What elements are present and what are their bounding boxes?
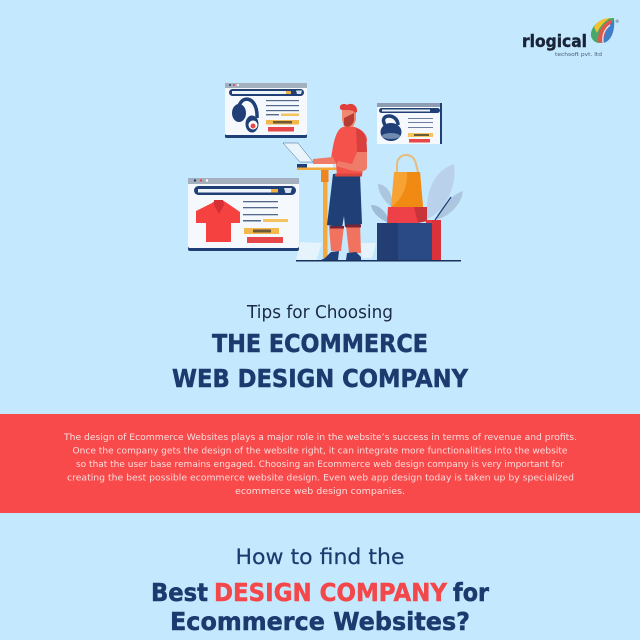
shorts	[327, 174, 362, 228]
ground line	[296, 260, 461, 262]
product card: headphones	[225, 83, 307, 138]
intro paragraph: Once the company gets the design of the website right, it can integrate more functionalities into the website	[72, 446, 568, 456]
heading: how to find the: How to find the	[236, 545, 404, 569]
intro paragraph: so that the user base remains engaged. Choosing an Ecommerce web design company is very important for	[76, 460, 564, 470]
logo: rlogical techsoft: rlogical	[522, 32, 587, 51]
white floor shapes	[296, 242, 322, 261]
standing desk with laptop	[283, 143, 345, 258]
product card: polo shirt	[188, 178, 299, 251]
heading: tips for choosing: Tips for Choosing	[246, 303, 393, 323]
legs	[329, 226, 344, 251]
panel: red intro band	[0, 414, 640, 513]
intro paragraph: creating the best possible ecommerce website design. Even web app design today is taken up by specialized	[67, 474, 574, 484]
shopping bags and boxes	[377, 155, 441, 261]
heading: the ecommerce web design company: THE ECOMMERCE	[212, 329, 428, 358]
shoes	[321, 251, 339, 260]
heading: best design company for ecommerce websites: Ecommerce Websites?	[170, 607, 470, 636]
heading: best design company for ecommerce websites	[151, 578, 490, 636]
product card: kettlebell	[377, 103, 442, 144]
heading: the ecommerce web design company: WEB DESIGN COMPANY	[172, 364, 469, 393]
heading: best design company for ecommerce websites: Best	[151, 578, 208, 607]
arms	[313, 157, 336, 164]
shirt	[331, 127, 367, 176]
head	[342, 108, 356, 127]
logo: rlogical techsoft: techsoft pvt. ltd	[555, 52, 602, 58]
decorative leaves	[371, 164, 463, 222]
logo: rlogical techsoft	[522, 18, 620, 58]
man standing	[313, 104, 367, 260]
heading: best design company for ecommerce websites: for	[453, 578, 490, 607]
heading: best design company for ecommerce websites: DESIGN COMPANY	[214, 578, 448, 607]
intro paragraph: The design of Ecommerce Websites plays a major role in the website’s success in terms of revenue and profits.	[63, 433, 577, 443]
intro paragraph: ecommerce web design companies.	[235, 487, 405, 497]
logo: rlogical techsoft: ®	[615, 18, 620, 25]
illustration: ecommerce designer	[188, 83, 463, 262]
heading: the ecommerce web design company	[172, 329, 469, 393]
intro paragraph	[63, 433, 577, 497]
